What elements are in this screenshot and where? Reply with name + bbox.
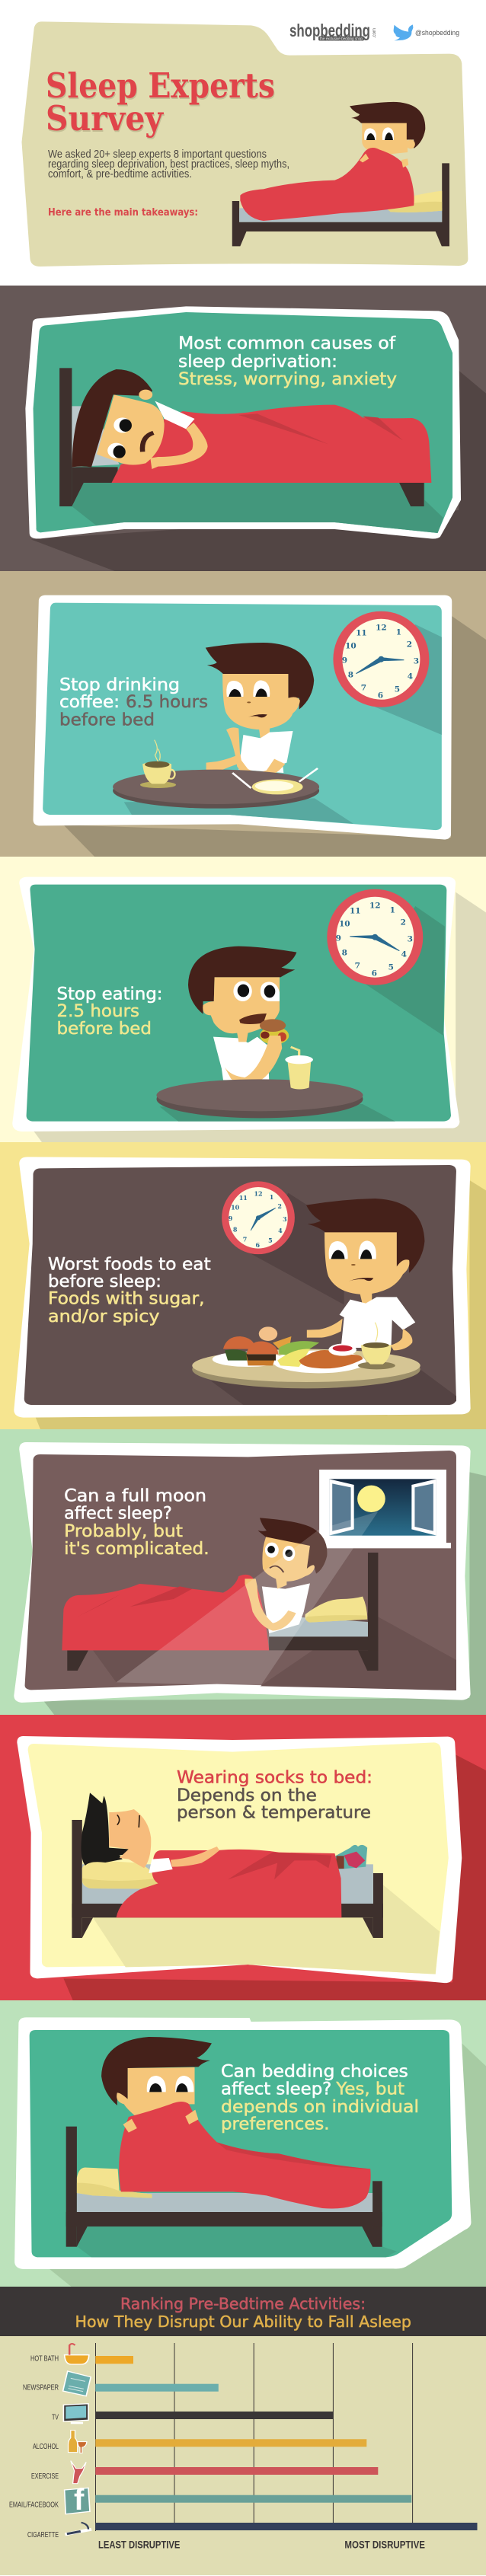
bar: exercise xyxy=(95,2467,378,2475)
icons: activity stickers xyxy=(63,2344,91,2534)
heading xyxy=(48,1256,211,1326)
clock showing 3:45-style time: 9 xyxy=(336,934,341,943)
panel: ranking of pre-bedtime activities xyxy=(0,2287,486,2575)
bar: alcohol xyxy=(95,2439,366,2447)
clock showing 7:10-style time: 3 xyxy=(283,1216,287,1223)
intro text xyxy=(48,148,289,180)
clock showing 7:10-style time: 10 xyxy=(231,1205,240,1211)
heading: Foods with sugar, xyxy=(48,1290,204,1309)
clock showing 7:15-style time: 8 xyxy=(348,671,353,680)
clock showing 7:10-style time: 4 xyxy=(278,1227,283,1234)
scene: card with boy and plate of food xyxy=(14,1157,486,1429)
clock showing 3:45-style time: 2 xyxy=(401,918,406,927)
clock showing 7:15-style time: 9 xyxy=(342,656,347,666)
clock showing 7:15-style time: 4 xyxy=(408,672,413,682)
icon: cigarette xyxy=(65,2523,91,2534)
panel: stop drinking coffee xyxy=(0,571,486,857)
category labels: NEWSPAPER xyxy=(23,2383,59,2392)
panel: stop eating xyxy=(0,857,486,1142)
clock showing 7:10-style time: 7 xyxy=(243,1236,247,1243)
axis label: most disruptive: MOST DISRUPTIVE xyxy=(344,2539,425,2551)
icon: exercising person xyxy=(71,2461,86,2484)
category labels: EMAIL/FACEBOOK xyxy=(9,2501,59,2510)
chart background xyxy=(0,2336,486,2575)
section background xyxy=(0,286,486,571)
clock showing 7:10-style time: 1 xyxy=(270,1194,273,1201)
bar: tv xyxy=(95,2412,333,2419)
section background xyxy=(0,2000,486,2287)
clock showing 7:15-style time: 5 xyxy=(395,685,400,694)
clock showing 7:10-style time: 8 xyxy=(233,1227,238,1234)
heading: Wearing socks to bed: xyxy=(177,1769,372,1788)
clock showing 3:45-style time: 7 xyxy=(355,962,360,971)
panel: intro header xyxy=(21,21,468,267)
heading xyxy=(177,1769,372,1823)
heading: Can a full moon xyxy=(64,1487,206,1506)
chart heading band: How They Disrupt Our Ability to Fall Asleep xyxy=(75,2313,411,2331)
clock showing 7:15-style time: 12 xyxy=(376,624,387,633)
intro text: regarding sleep deprivation, best practices, sleep myths, xyxy=(48,158,289,171)
clock showing 3:45-style time: 10 xyxy=(339,920,350,929)
illustration: boy hiding under blanket in bed xyxy=(232,102,449,246)
heading: before bed xyxy=(56,1020,152,1039)
heading: preferences. xyxy=(221,2115,329,2134)
panel: worst foods xyxy=(0,1142,486,1429)
heading: depends on individual xyxy=(221,2098,419,2117)
clock showing 7:15-style time xyxy=(333,611,429,707)
heading: coffee: xyxy=(59,693,120,712)
heading xyxy=(221,2062,419,2134)
clock showing 7:15-style time: 1 xyxy=(396,628,401,637)
heading: Worst foods to eat xyxy=(48,1256,211,1275)
icon: bathtub xyxy=(65,2344,89,2364)
icon: facebook xyxy=(65,2488,90,2514)
heading: before bed xyxy=(59,711,155,730)
section background xyxy=(0,857,486,1142)
logo: shopbedding: the exclusive bedding shop xyxy=(320,37,363,41)
bar: newspaper xyxy=(95,2384,219,2392)
scene: card with boy hiding under blanket xyxy=(14,2017,486,2287)
panel: bedding choices xyxy=(0,2000,486,2287)
bar: hot bath xyxy=(95,2356,133,2364)
heading xyxy=(59,676,208,730)
clock showing 3:45-style time: 6 xyxy=(372,969,377,978)
scene: card with girl in bed xyxy=(25,306,486,571)
chart heading band: Ranking Pre-Bedtime Activities: xyxy=(120,2295,366,2313)
takeaways line: Here are the main takeaways: xyxy=(48,206,198,219)
clock showing 7:10-style time: 5 xyxy=(268,1237,273,1244)
facebook letter: f xyxy=(74,2483,85,2517)
category labels: CIGARETTE xyxy=(27,2530,59,2539)
heading: affect sleep? xyxy=(221,2080,331,2099)
heading xyxy=(56,985,163,1039)
title: Survey xyxy=(46,98,165,139)
bar: email/facebook xyxy=(95,2495,411,2503)
heading: Probably, but xyxy=(64,1522,183,1541)
clock showing 7:10-style time: 6 xyxy=(255,1242,260,1249)
twitter handle: @shopbedding xyxy=(415,29,459,37)
clock showing 7:10-style time: 11 xyxy=(239,1195,248,1202)
clock showing 7:15-style time: 6 xyxy=(378,691,383,701)
chart heading band xyxy=(0,2287,486,2336)
scene: card with boy, coffee and table xyxy=(34,595,486,857)
clock showing 7:15-style time: 2 xyxy=(407,640,412,650)
clock showing 3:45-style time: 3 xyxy=(408,935,413,944)
clock showing 3:45-style time: 12 xyxy=(369,902,381,911)
heading: affect sleep? xyxy=(64,1505,172,1524)
heading: Stop eating: xyxy=(56,985,163,1004)
heading: Most common causes of xyxy=(178,334,396,353)
heading: 6.5 hours xyxy=(126,693,208,712)
scene: card with boy in bed and moonlit window xyxy=(14,1442,486,1715)
category labels: ALCOHOL xyxy=(33,2442,59,2451)
heading: sleep deprivation: xyxy=(178,353,337,372)
section background xyxy=(0,571,486,857)
panel: causes of sleep deprivation xyxy=(0,286,486,571)
clock showing 7:15-style time: 3 xyxy=(414,657,419,666)
heading: Can bedding choices xyxy=(221,2062,408,2081)
clock showing 3:45-style time: 1 xyxy=(390,906,395,915)
heading: it's complicated. xyxy=(64,1540,209,1559)
title: Sleep Experts xyxy=(46,65,275,106)
intro text: We asked 20+ sleep experts 8 important questions xyxy=(48,148,267,161)
clock showing 3:45-style time xyxy=(327,889,423,985)
category labels: TV xyxy=(52,2413,59,2422)
heading: Depends on the xyxy=(177,1786,317,1805)
heading: and/or spicy xyxy=(48,1307,160,1326)
category labels: HOT BATH xyxy=(30,2354,59,2364)
clock showing 7:10-style time xyxy=(222,1181,295,1254)
scene: card with boy eating burger xyxy=(12,877,486,1142)
heading: Stress, worrying, anxiety xyxy=(178,370,397,389)
clock showing 7:15-style time: 11 xyxy=(356,629,367,638)
heading xyxy=(64,1487,209,1559)
clock showing 7:10-style time: 9 xyxy=(229,1215,233,1222)
category labels: EXERCISE xyxy=(31,2472,59,2481)
axis label: least disruptive: LEAST DISRUPTIVE xyxy=(98,2539,180,2551)
bar: cigarette xyxy=(95,2523,478,2530)
title xyxy=(46,65,275,139)
scene: card with sleeper wearing socks xyxy=(17,1736,486,2000)
clock showing 7:10-style time: 12 xyxy=(254,1190,263,1197)
folder card background xyxy=(21,21,468,267)
icon: alcohol bottle and glass xyxy=(69,2431,87,2453)
clock showing 3:45-style time: 4 xyxy=(401,950,407,959)
intro text: comfort, & pre-bedtime activities. xyxy=(48,168,192,180)
logo: shopbedding: .com xyxy=(372,28,377,38)
heading: person & temperature xyxy=(177,1804,371,1823)
heading: Yes, but xyxy=(335,2080,404,2099)
clock showing 3:45-style time: 8 xyxy=(342,949,347,958)
panel: full moon xyxy=(0,1429,486,1715)
heading: 2.5 hours xyxy=(56,1002,139,1021)
icon: newspaper xyxy=(63,2371,91,2396)
section background xyxy=(0,1142,486,1429)
icon: television xyxy=(63,2404,88,2424)
heading xyxy=(178,334,397,389)
section background xyxy=(0,1429,486,1715)
heading: Stop drinking xyxy=(59,676,180,695)
bar chart xyxy=(95,2343,478,2531)
panel: wearing socks xyxy=(0,1715,486,2000)
clock showing 3:45-style time: 5 xyxy=(388,963,394,972)
logo: shopbedding: shopbedding xyxy=(289,21,370,40)
clock showing 7:15-style time: 10 xyxy=(345,642,357,651)
icon: twitter bird xyxy=(394,24,413,40)
clock showing 3:45-style time: 11 xyxy=(350,907,361,916)
category labels xyxy=(9,2354,59,2539)
clock showing 7:15-style time: 7 xyxy=(361,684,366,693)
heading: before sleep: xyxy=(48,1272,161,1291)
section background xyxy=(0,1715,486,2000)
clock showing 7:10-style time: 2 xyxy=(277,1203,282,1210)
